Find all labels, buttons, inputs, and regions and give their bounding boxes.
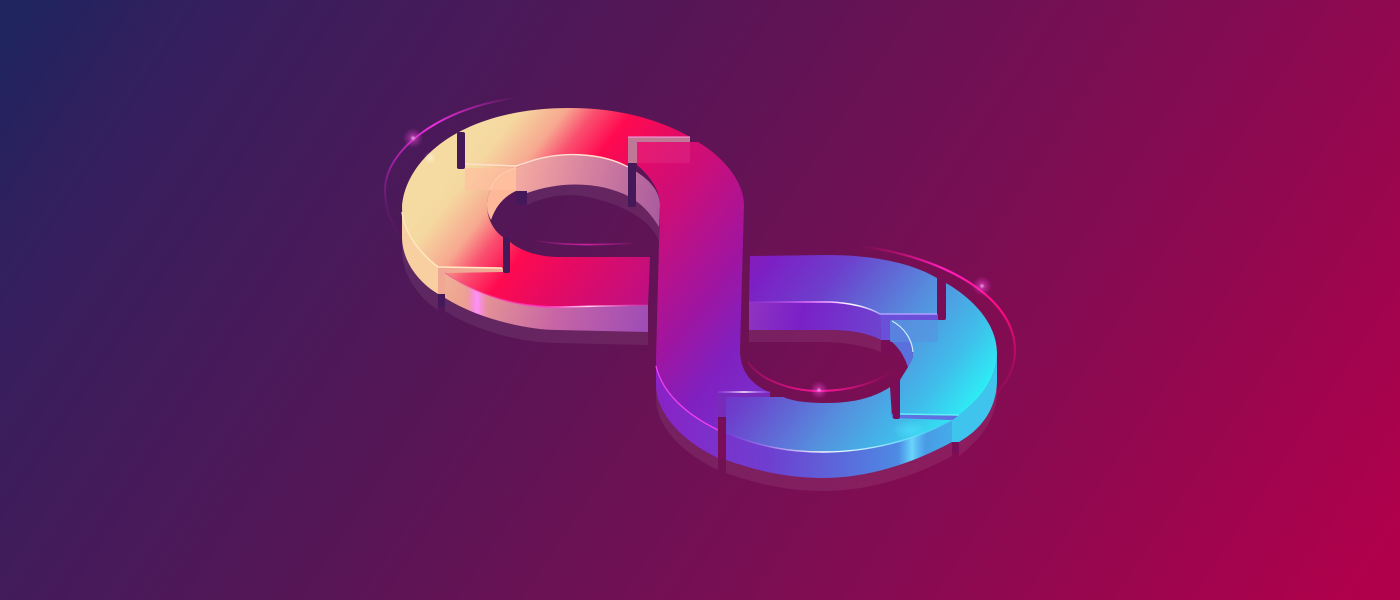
- translucent tab, upper left: [465, 168, 516, 190]
- tab highlight: [718, 391, 770, 393]
- right loop: back purple segment: [749, 255, 937, 314]
- left loop: strip beneath cream arc: [438, 267, 503, 294]
- inner orbit ring, left hole: [533, 240, 637, 245]
- left loop: hole walls: [487, 155, 660, 227]
- translucent tab, upper right: [628, 137, 690, 163]
- central band wall: [656, 360, 718, 458]
- inner wall left chunk: [487, 168, 516, 220]
- specular highlight on right wall: [900, 434, 924, 464]
- inner orbit ring, right hole: [748, 362, 892, 391]
- orbit ring: right: [860, 246, 1015, 403]
- central band tint strip: [637, 142, 690, 163]
- right loop: cyan segment: [890, 283, 997, 415]
- notches, left loop: [457, 132, 636, 273]
- right loop: front wall: [726, 420, 952, 478]
- left loop: front red segment: [445, 242, 650, 307]
- left loop: outer wall, back left: [402, 207, 445, 294]
- left loop: cream to red arc: [402, 108, 690, 268]
- rim highlight, cyan segment: [892, 321, 959, 415]
- right loop: cyan side wall: [952, 353, 997, 442]
- rim highlight, back segment: [749, 302, 937, 314]
- inner wall far side: [516, 155, 660, 227]
- right loop: strip beneath cyan segment: [892, 414, 959, 420]
- right loop: front blue segment: [726, 387, 952, 452]
- rim highlights, left loop: [402, 137, 690, 307]
- right loop: strip and wall beneath back segment: [880, 314, 938, 340]
- highlight glint on front segment: [892, 420, 928, 440]
- lens flares: [403, 128, 992, 399]
- rim highlight, central band: [656, 366, 718, 430]
- rim highlight, front blue segment: [726, 420, 952, 452]
- orbit ring: left: [385, 98, 515, 250]
- floor reflection of the loop: [402, 184, 997, 491]
- inner wall on right hole: [890, 320, 913, 367]
- notch: left outer wall: [438, 294, 445, 307]
- translucent tab, lower centre: [718, 392, 770, 417]
- right loop: back wall: [749, 302, 881, 340]
- specular highlight on left wall: [467, 287, 487, 317]
- notches, right loop: [718, 283, 959, 459]
- translucent tab, right loop: [890, 320, 938, 342]
- left loop: outer wall, front: [445, 273, 648, 332]
- central band: [637, 142, 771, 430]
